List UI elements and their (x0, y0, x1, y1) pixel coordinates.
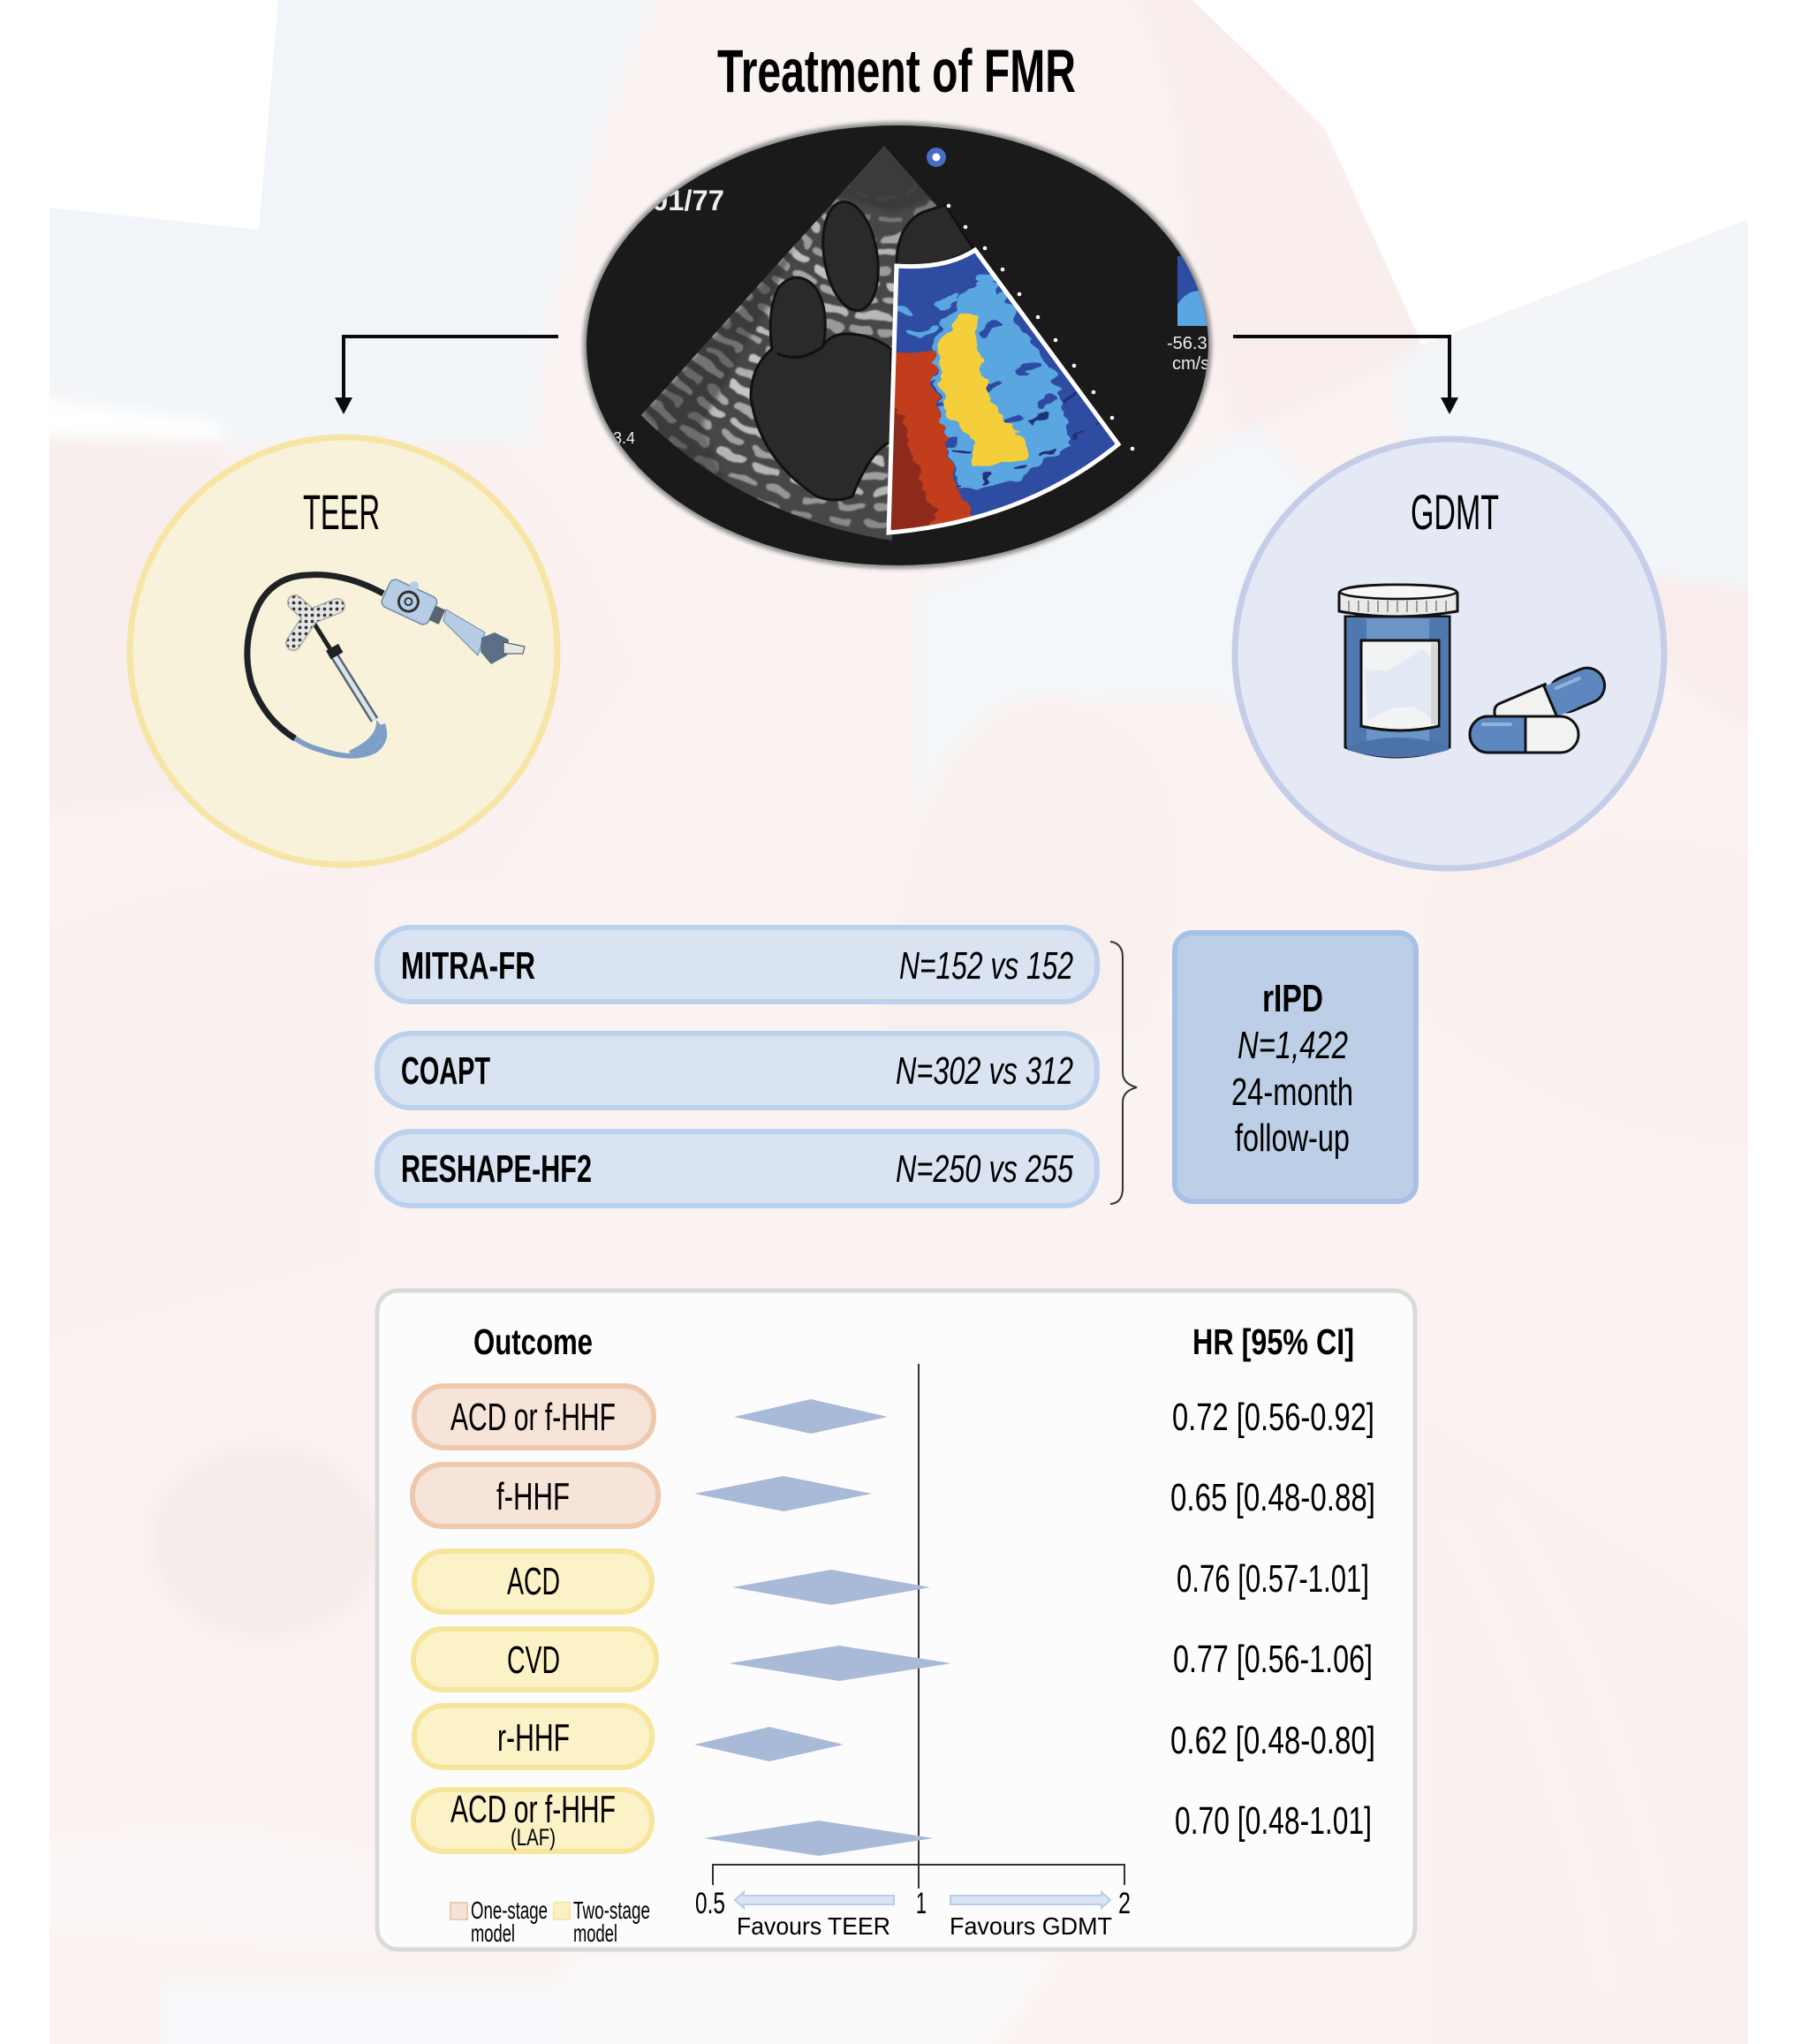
ultrasound readouts: 3.4 (613, 429, 635, 447)
trial row: RESHAPE-HF2 (377, 1132, 1097, 1206)
icon: capsules (1470, 662, 1610, 753)
row: ACD or f-HHF (LAF): (LAF) (511, 1824, 556, 1851)
trial row: COAPT: COAPT (401, 1049, 490, 1093)
colour scale (1177, 256, 1208, 326)
Outcome heading: Outcome (473, 1321, 593, 1362)
heart chambers (751, 198, 973, 500)
ultrasound readouts: cm/s (1172, 354, 1209, 374)
legend: two-stage model (554, 1896, 650, 1947)
forest plot axis: 2 (1118, 1887, 1131, 1920)
legend: two-stage model: model (573, 1919, 617, 1947)
row: ACD or f-HHF (LAF): 0.70 [0.48-1.01] (1175, 1799, 1372, 1843)
panel: TEER circle (130, 437, 557, 865)
ultrasound readouts: -56.3 (1167, 334, 1207, 353)
trial row: MITRA-FR: N=152 vs 152 (899, 944, 1073, 988)
legend: one-stage model: One-stage (471, 1896, 548, 1924)
row: CVD (two-stage): CVD (507, 1639, 560, 1682)
panel: rIPD summary: rIPD (1262, 977, 1323, 1020)
ultrasound oval image (580, 119, 1215, 572)
arrow: favours TEER: Favours TEER (737, 1912, 890, 1940)
row: f-HHF (one-stage): 0.65 [0.48-0.88] (1170, 1476, 1375, 1519)
reference line at HR 1 (918, 1364, 920, 1889)
brace (1110, 942, 1137, 1204)
depth ticks (947, 204, 1134, 450)
forest plot axis: 0.5 (695, 1887, 725, 1920)
legend: two-stage model: Two-stage (573, 1896, 650, 1924)
arrow: favours GDMT (950, 1892, 1112, 1940)
ultrasound readouts (613, 185, 1209, 447)
panel: GDMT circle (1235, 439, 1664, 868)
row: r-HHF (two-stage): r-HHF (497, 1716, 570, 1760)
ultrasound readouts: 01/77 (652, 185, 724, 216)
TEER label: TEER (303, 484, 380, 540)
forest plot axis: 1 (916, 1887, 927, 1920)
row: ACD or f-HHF (one-stage) (414, 1386, 1374, 1448)
legend: one-stage model (450, 1896, 548, 1947)
GDMT label: GDMT (1411, 484, 1499, 540)
panel: rIPD summary (1175, 933, 1416, 1201)
colour doppler sector (886, 247, 1122, 535)
HR heading: HR [95% CI] (1192, 1321, 1354, 1362)
row: ACD or f-HHF (LAF) (413, 1788, 1372, 1856)
arrow: favours TEER (735, 1892, 894, 1940)
row: ACD or f-HHF (LAF): ACD or f-HHF (450, 1788, 616, 1831)
trial row: RESHAPE-HF2: RESHAPE-HF2 (401, 1147, 592, 1191)
arrow to TEER (335, 337, 558, 414)
row: CVD (two-stage): 0.77 [0.56-1.06] (1173, 1638, 1373, 1681)
row: ACD (two-stage): 0.76 [0.57-1.01] (1177, 1557, 1369, 1601)
row: ACD or f-HHF (one-stage): ACD or f-HHF (450, 1396, 616, 1439)
trial row: COAPT (377, 1033, 1097, 1108)
row: f-HHF (one-stage): f-HHF (496, 1475, 570, 1518)
row: ACD (two-stage): ACD (507, 1560, 560, 1603)
row: f-HHF (one-stage) (413, 1465, 1375, 1526)
panel: rIPD summary: 24-month (1231, 1071, 1353, 1114)
trial row: MITRA-FR: MITRA-FR (401, 944, 535, 988)
arrow: favours GDMT: Favours GDMT (950, 1912, 1112, 1940)
title: Treatment of FMR (717, 37, 1076, 105)
trial row: COAPT: N=302 vs 312 (896, 1049, 1073, 1093)
row: ACD or f-HHF (one-stage): 0.72 [0.56-0.92] (1172, 1396, 1374, 1439)
icon: TEER clip delivery device (247, 575, 525, 757)
panel: forest plot (377, 1291, 1415, 1949)
icon: pill bottle (1339, 585, 1457, 758)
trial row: MITRA-FR (377, 927, 1097, 1002)
forest plot axis (695, 1865, 1131, 1920)
row: ACD (two-stage) (414, 1551, 1369, 1612)
panel: rIPD summary: follow-up (1235, 1117, 1350, 1160)
trial row: RESHAPE-HF2: N=250 vs 255 (896, 1147, 1073, 1191)
panel: rIPD summary: N=1,422 (1238, 1024, 1348, 1067)
row: r-HHF (two-stage) (414, 1706, 1375, 1768)
row: r-HHF (two-stage): 0.62 [0.48-0.80] (1170, 1719, 1375, 1762)
legend: one-stage model: model (471, 1919, 515, 1947)
row: CVD (two-stage) (413, 1629, 1373, 1690)
probe marker (927, 148, 946, 167)
arrow to GDMT (1233, 337, 1458, 414)
